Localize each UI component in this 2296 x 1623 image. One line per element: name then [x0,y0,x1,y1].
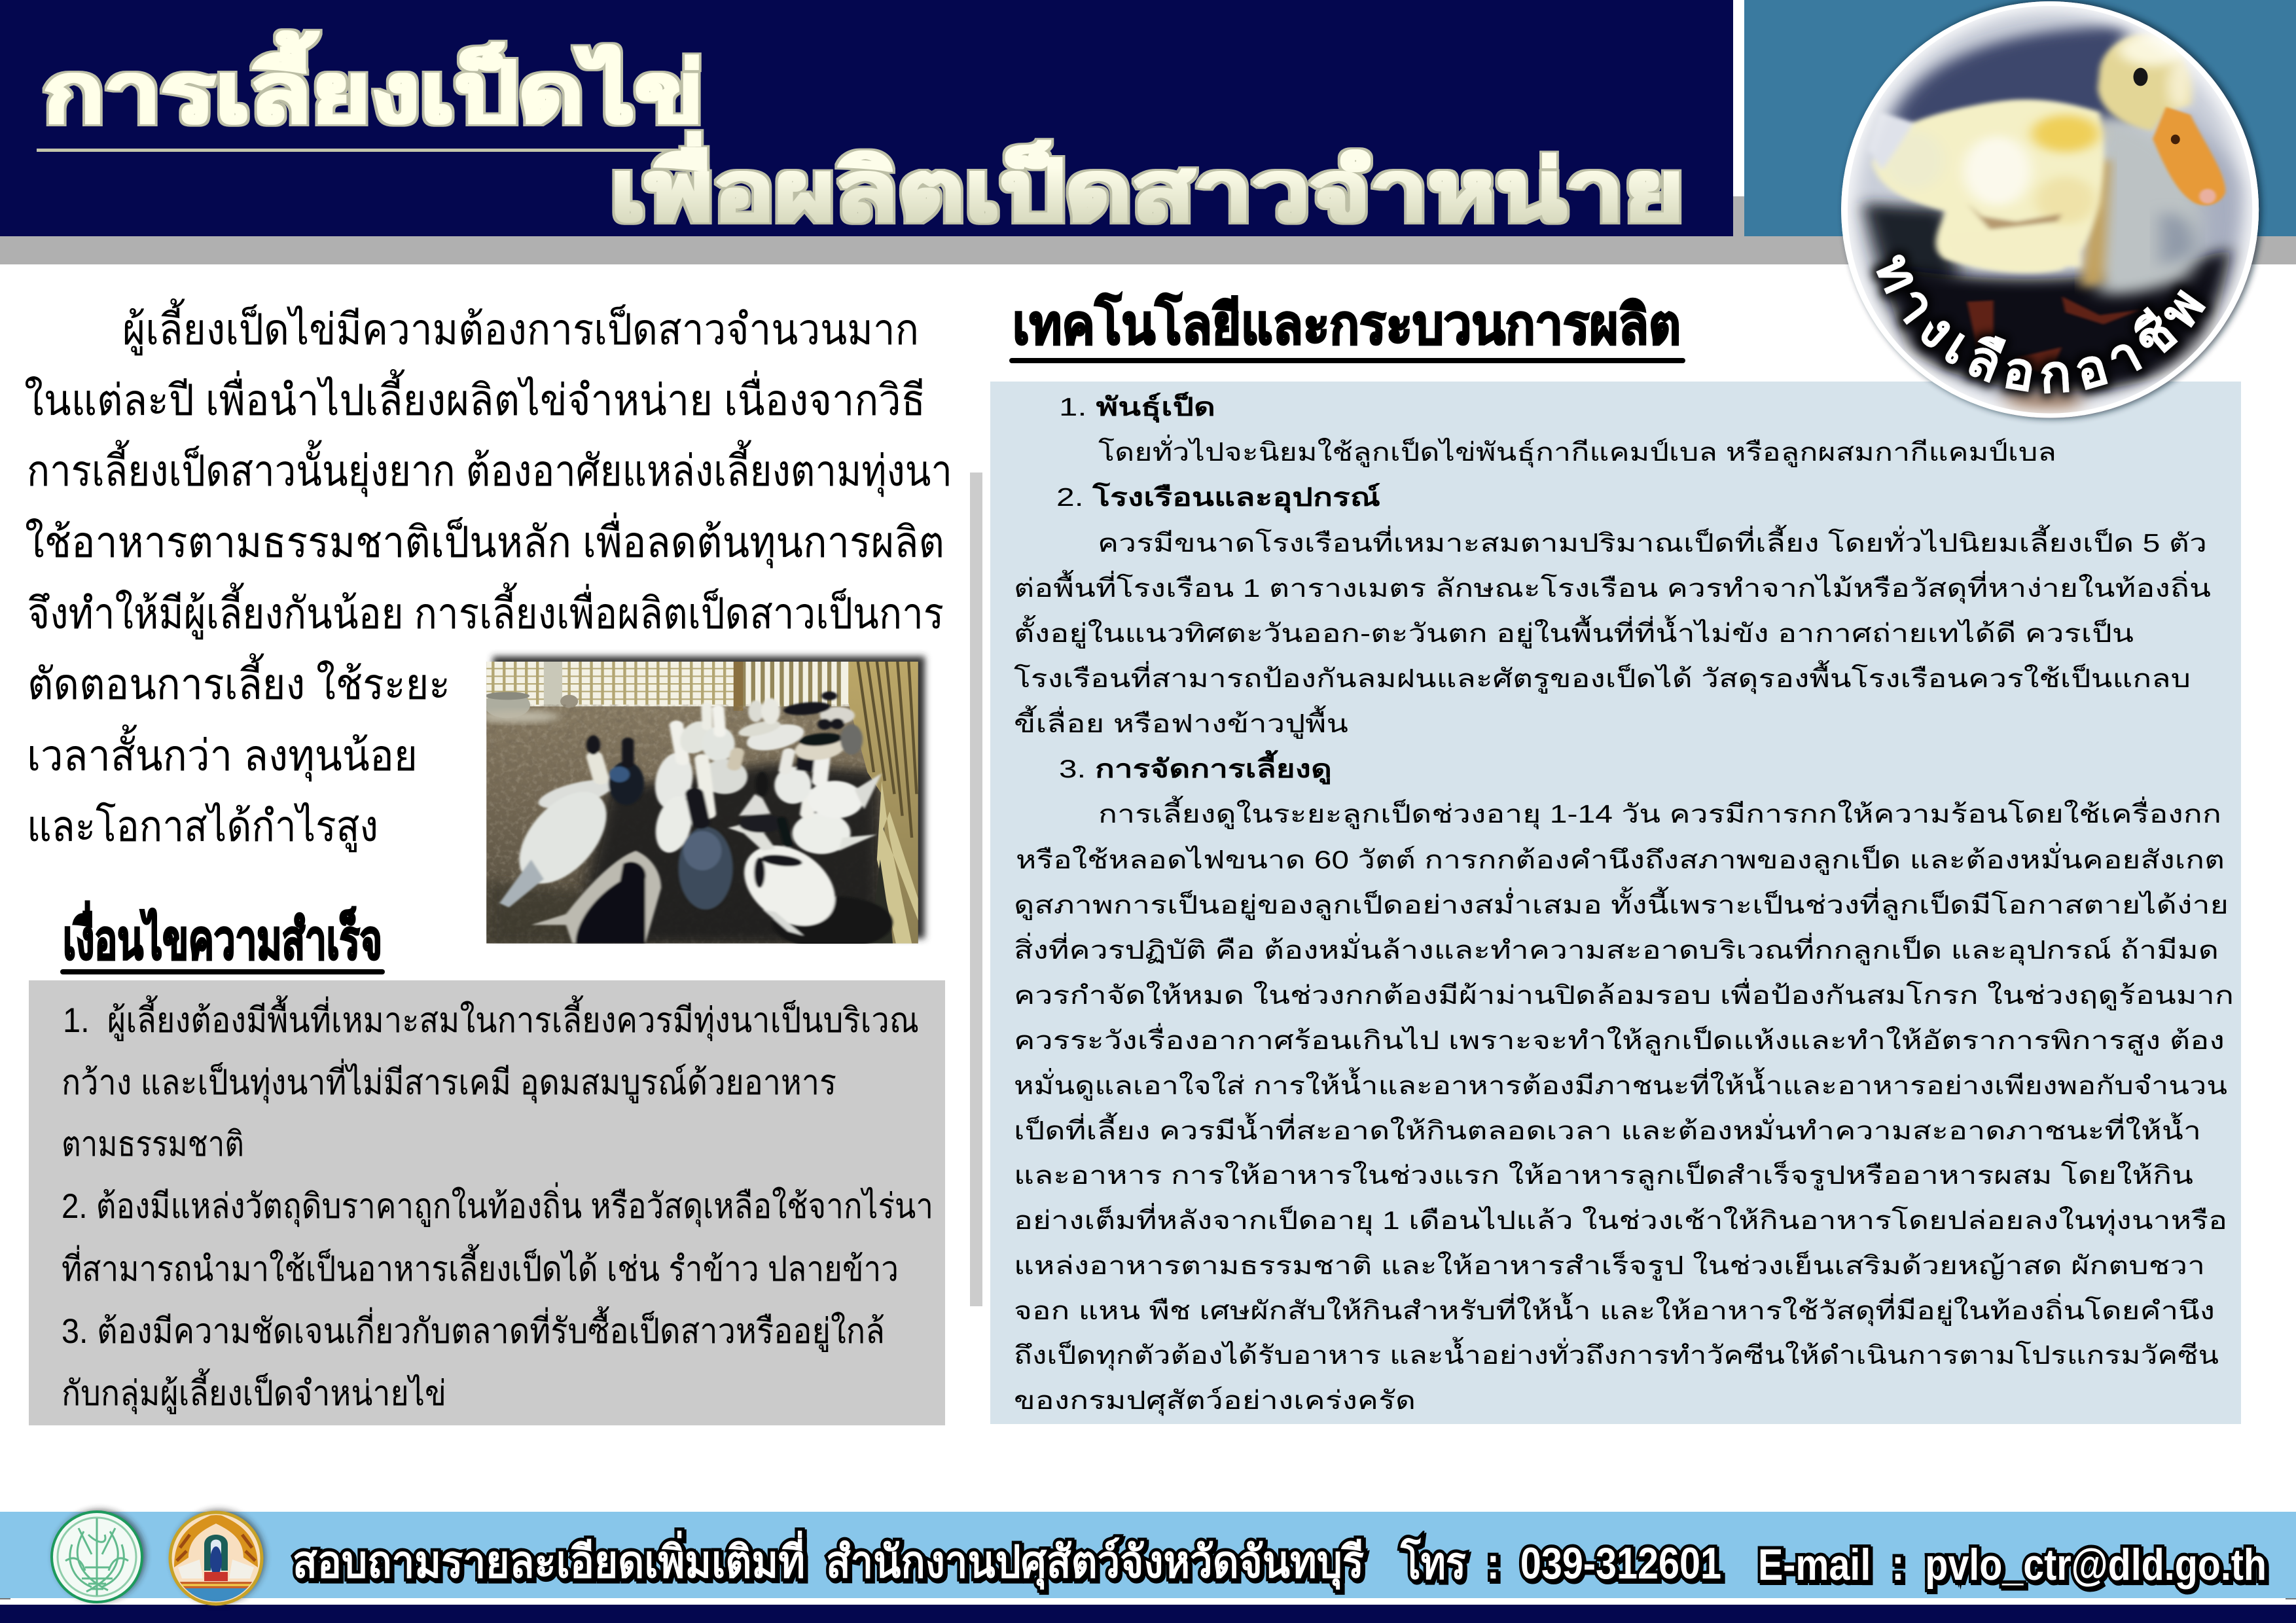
panel: technology and production process: 2. โรงเรือนและอุปกรณ์ [1056,482,1380,513]
panel: technology and production process: โดยทั่วไปจะนิยมใช้ลูกเป็ดไข่พันธุ์กากีแคมป์เบล หรือลูกผสมกากีแคมป์เบล [1098,435,2056,468]
panel: success conditions: 1. ผู้เลี้ยงต้องมีพื้นที่เหมาะสมในการเลี้ยงควรมีทุ่งนาเป็นบริเวณ [63,995,919,1041]
panel: success conditions: 3. ต้องมีความชัดเจนเกี่ยวกับตลาดที่รับซื้อเป็ดสาวหรืออยู่ใกล้ [62,1306,885,1352]
panel: technology and production process: ตั้งอยู่ในแนวทิศตะวันออก-ตะวันตก อยู่ในพื้นที่ที่น้ำไม่ขัง อากาศถ่ายเทได้ดี ควรเป็น [1014,615,2134,649]
footer text: สอบถามรายละเอียดเพิ่มเติมที่ [293,1530,805,1587]
panel: technology and production process: ของกรมปศุสัตว์อย่างเคร่งครัด [1014,1386,1416,1416]
panel: technology and production process: โรงเรือนที่สามารถป้องกันลมฝนและศัตรูของเป็ดได้ วัสดุรองพื้นโรงเรือนควรใช้เป็นแกลบ [1014,660,2191,694]
text block: introduction [24,298,952,853]
footer text: สำนักงานปศุสัตว์จังหวัดจันทบุรี [826,1537,1364,1590]
panel: technology and production process: และอาหาร การให้อาหารในช่วงแรก ให้อาหารลูกเป็ดสำเร็จรูปหรืออาหารผสม โดยให้กิน [1014,1160,2193,1190]
panel: technology and production process: เป็ดที่เลี้ยง ควรมีน้ำที่สะอาดให้กินตลอดเวลา และต้องหมั่นทำความสะอาดภาชนะที่ให้น้ำ [1014,1112,2201,1145]
text block: introduction: และโอกาสได้กำไรสูง [27,802,378,853]
text block: introduction: เวลาสั้นกว่า ลงทุนน้อย [27,724,418,782]
panel: technology and production process: ควรระวังเรื่องอากาศร้อนเกินไป เพราะจะทำให้ลูกเป็ดแห้งและทำให้อัตราการพิการสูง ต้อง [1014,1023,2225,1056]
badge: duck portrait with curved caption [1840,0,2265,424]
panel: technology and production process: ดูสภาพการเป็นอยู่ของลูกเป็ดอย่างสม่ำเสมอ ทั้งนี้เพราะเป็นช่วงที่ลูกเป็ดมีโอกาสตายได้ง่าย [1014,886,2229,920]
title [37,30,1684,239]
footer text [293,1530,2267,1590]
text block: introduction: จึงทำให้มีผู้เลี้ยงกันน้อย การเลี้ยงเพื่อผลิตเป็ดสาวเป็นการ [27,582,944,640]
heading: success conditions [60,901,385,974]
text block: introduction: การเลี้ยงเป็ดสาวนั้นยุ่งยาก ต้องอาศัยแหล่งเลี้ยงตามทุ่งนา [27,440,952,497]
text block: introduction: ในแต่ละปี เพื่อนำไปเลี้ยงผลิตไข่จำหน่าย เนื่องจากวิธี [24,369,925,424]
panel: technology and production process: ถึงเป็ดทุกตัวต้องได้รับอาหาร และน้ำอย่างทั่วถึงการทำวัคซีนให้ดำเนินการตามโปรแกรมวัคซีน [1014,1336,2219,1371]
panel: success conditions: กับกลุ่มผู้เลี้ยงเป็ดจำหน่ายไข่ [62,1368,446,1414]
panel: technology and production process: 1. พันธุ์เป็ด [1059,391,1215,423]
panel: success conditions: 2. ต้องมีแหล่งวัตถุดิบราคาถูกในท้องถิ่น หรือวัสดุเหลือใช้จากไร่นา [62,1182,933,1227]
panel: technology and production process: ต่อพื้นที่โรงเรือน 1 ตารางเมตร ลักษณะโรงเรือน ควรทำจากไม้หรือวัสดุที่หาง่ายในท้องถิ่น [1014,569,2211,604]
title: เพื่อผลิตเป็ดสาวจำหน่าย [610,132,1684,239]
panel: technology and production process: จอก แหน พืช เศษผักสับให้กินสำหรับที่ให้น้ำ และให้อาหารใช้วัสดุที่มีอยู่ในท้องถิ่นโดยคำนึง [1014,1292,2215,1327]
panel: technology and production process: สิ่งที่ควรปฏิบัติ คือ ต้องหมั่นล้างและทำความสะอาดบริเวณที่กกลูกเป็ด และอุปกรณ์ ถ้ามีมด [1014,933,2219,966]
panel: technology and production process [990,382,2241,1424]
icon: Chanthaburi provincial seal [170,1510,265,1606]
panel: technology and production process: 3. การจัดการเลี้ยงดู [1059,750,1332,785]
panel: success conditions [29,980,945,1425]
text block: introduction: ใช้อาหารตามธรรมชาติเป็นหลัก เพื่อลดต้นทุนการผลิต [25,512,944,569]
ducks [499,692,893,949]
photo: ducks in a pen [477,656,925,949]
panel: technology and production process: ขี้เลื่อย หรือฟางข้าวปูพื้น [1014,705,1348,739]
icon: livestock department seal [52,1510,145,1602]
heading: success conditions: เงื่อนไขความสำเร็จ [63,901,382,971]
panel: success conditions: ที่สามารถนำมาใช้เป็นอาหารเลี้ยงเป็ดได้ เช่น รำข้าว ปลายข้าว [62,1244,899,1289]
panel: technology and production process: หมั่นดูแลเอาใจใส่ การให้น้ำและอาหารต้องมีภาชนะที่ให้น้ำและอาหารอย่างเพียงพอกับจำนวน [1014,1067,2227,1101]
panel: technology and production process: ควรกำจัดให้หมด ในช่วงกกต้องมีผ้าม่านปิดล้อมรอบ เพื่อป้องกันสมโกรก ในช่วงฤดูร้อนมาก [1014,978,2234,1010]
footer text: โทร : 039-312601 [1400,1537,1721,1588]
panel: technology and production process: การเลี้ยงดูในระยะลูกเป็ดช่วงอายุ 1-14 วัน ควรมีการกกให้ความร้อนโดยใช้เครื่องกก [1098,795,2221,830]
title: การเลี้ยงเป็ดไข่ [43,30,704,141]
heading: technology and production process: เทคโนโลยีและกระบวนการผลิต [1013,293,1681,355]
panel: technology and production process: แหล่งอาหารตามธรรมชาติ และให้อาหารสำเร็จรูป ในช่วงเย็นเสริมด้วยหญ้าสด ผักตบชวา [1014,1250,2205,1281]
text block: introduction: ตัดตอนการเลี้ยง ใช้ระยะ [27,653,450,708]
panel: technology and production process: หรือใช้หลอดไฟขนาด 60 วัตต์ การกกต้องคำนึงถึงสภาพของลูกเป็ด และต้องหมั่นคอยสังเกต [1016,842,2225,875]
panel: technology and production process: ควรมีขนาดโรงเรือนที่เหมาะสมตามปริมาณเป็ดที่เลี้ยง โดยทั่วไปนิยมเลี้ยงเป็ด 5 ตัว [1098,524,2207,558]
panel: success conditions: ตามธรรมชาติ [62,1125,244,1164]
footer contact band [0,1510,2296,1623]
text block: introduction: ผู้เลี้ยงเป็ดไข่มีความต้องการเป็ดสาวจำนวนมาก [122,298,919,356]
caption: ทางเลือกอาชีพ: ทางเลือกอาชีพ [1865,248,2215,404]
panel: success conditions: กว้าง และเป็นทุ่งนาที่ไม่มีสารเคมี อุดมสมบูรณ์ด้วยอาหาร [62,1058,836,1103]
panel: technology and production process: อย่างเต็มที่หลังจากเป็ดอายุ 1 เดือนไปแล้ว ในช่วงเช้าให้กินอาหารโดยปล่อยลงในทุ่งนาหรือ [1014,1203,2227,1236]
header banner [0,0,2296,264]
